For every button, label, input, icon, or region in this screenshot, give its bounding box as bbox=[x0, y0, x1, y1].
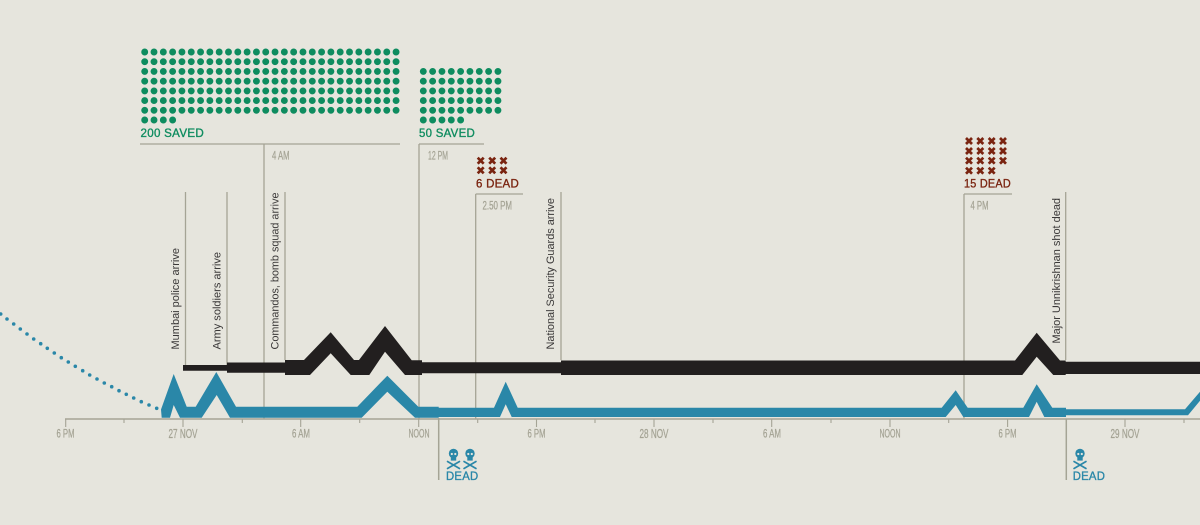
icon: skull and crossbones 1 bbox=[448, 449, 460, 468]
label: 200 saved: 200 SAVED bbox=[140, 126, 204, 140]
guide lines and brackets bbox=[140, 144, 1066, 480]
event: National Security Guards arrive: National Security Guards arrive bbox=[545, 198, 557, 350]
axis labels: 29 NOV bbox=[1110, 427, 1140, 441]
green dots: 200 saved bbox=[145, 52, 397, 120]
time axis bbox=[56, 419, 1200, 441]
axis labels: 27 NOV bbox=[168, 427, 198, 441]
crosses: 15 dead bbox=[966, 138, 1006, 174]
event: Major Unnikrishnan shot dead: Major Unnikrishnan shot dead bbox=[1051, 198, 1063, 344]
label: 50 saved: 50 SAVED bbox=[419, 126, 475, 140]
axis labels: 6 PM bbox=[998, 428, 1016, 440]
event: Commandos, bomb squad arrive: Commandos, bomb squad arrive bbox=[270, 192, 282, 350]
icon: skull and crossbones 2 bbox=[464, 449, 476, 468]
time note: 2.50 PM: 2.50 PM bbox=[482, 200, 512, 212]
axis labels bbox=[56, 427, 1140, 441]
teal line: deaths bbox=[161, 372, 1200, 418]
event: Army soldiers arrive: Army soldiers arrive bbox=[212, 252, 224, 350]
label: dead (first): DEAD bbox=[446, 469, 479, 483]
green dots: 50 saved bbox=[423, 71, 499, 120]
axis labels: 6 AM bbox=[292, 428, 310, 440]
time note: 12 PM: 12 PM bbox=[428, 150, 448, 162]
axis labels: 6 AM bbox=[763, 428, 781, 440]
teal dotted curve bbox=[0, 312, 159, 410]
label: 6 dead: 6 DEAD bbox=[476, 176, 519, 190]
black line: forces deployed bbox=[183, 326, 1200, 375]
axis labels: 6 PM bbox=[528, 428, 546, 440]
label: 15 dead: 15 DEAD bbox=[964, 176, 1011, 190]
axis labels: 28 NOV bbox=[640, 427, 669, 441]
crosses: 6 dead bbox=[478, 158, 506, 173]
axis labels: 6 PM bbox=[56, 428, 74, 440]
time note: 4 AM: 4 AM bbox=[272, 150, 290, 162]
label: dead (second): DEAD bbox=[1073, 469, 1105, 483]
icon: skull and crossbones 3 bbox=[1074, 449, 1086, 468]
event: Mumbai police arrive: Mumbai police arrive bbox=[170, 248, 182, 350]
axis labels: NOON bbox=[880, 428, 900, 440]
axis labels: NOON bbox=[408, 428, 430, 440]
time note: 4 PM: 4 PM bbox=[970, 200, 988, 212]
